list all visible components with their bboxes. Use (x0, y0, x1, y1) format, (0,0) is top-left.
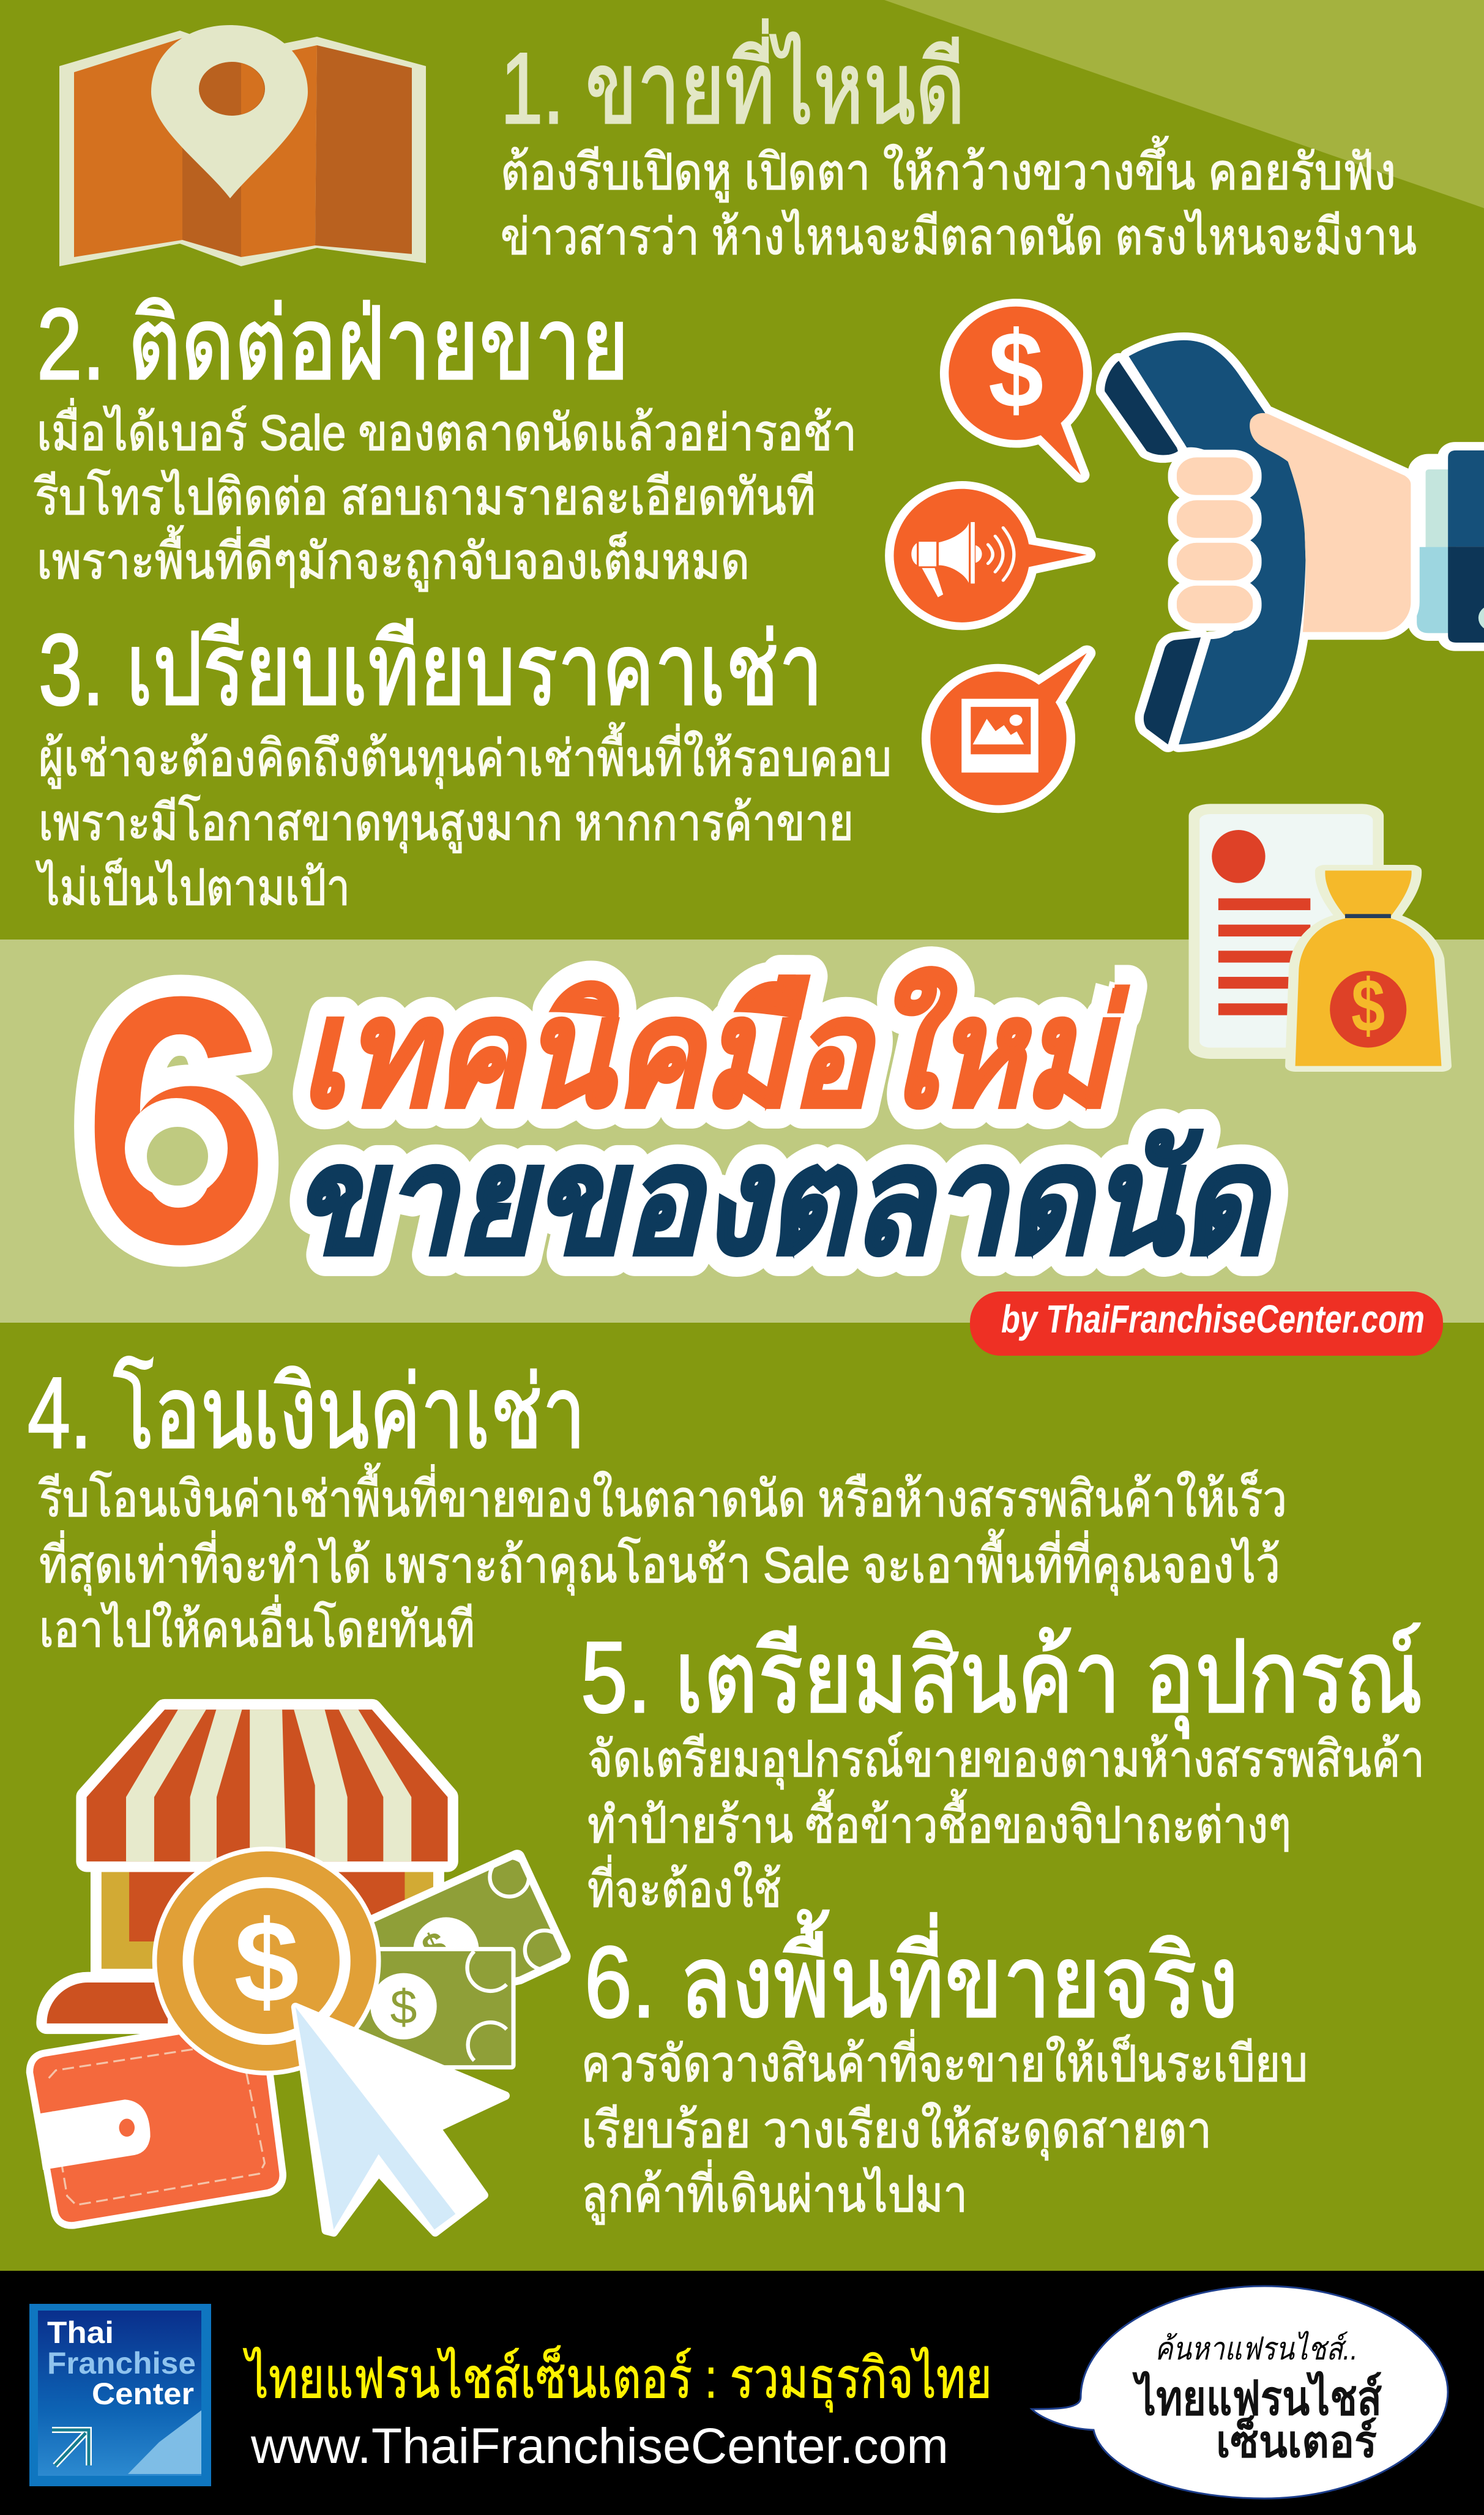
title line 1: เทคนิคมือใหม่ (300, 968, 1128, 1137)
icon: coin: $ (234, 1896, 299, 2027)
title line 2: ขายของตลาดนัด (293, 1116, 1272, 1284)
icon: hand holding phone with speech bubbles (893, 307, 1484, 805)
text block 5: ทำป้ายร้าน ซื้อข้าวชื้อของจิปาถะต่างๆ (587, 1789, 1291, 1853)
logo: Thai Franchise Center: Franchise (47, 2346, 196, 2380)
icon: banknotes: $ (416, 1923, 453, 1971)
icon: document and money bag (1188, 804, 1442, 1066)
heading 2: 2. ติดต่อฝ่ายขาย (37, 288, 629, 400)
icon: sleeve and cuff (1417, 450, 1484, 643)
heading 6: 6. ลงพื้นที่ขายจริง (584, 1910, 1239, 2038)
text block 2: รีบโทรไปติดต่อ สอบถามรายละเอียดทันที (34, 469, 816, 525)
icon: document (1188, 804, 1384, 1059)
icon: money bag (1296, 870, 1442, 1066)
footer tagline: ไทยแฟรนไชส์เซ็นเตอร์ : รวมธุรกิจไทย (242, 2345, 992, 2413)
text block 5 (587, 1732, 1425, 1918)
callout: speech bubble (1032, 2286, 1448, 2498)
icon: wallet (33, 2022, 279, 2222)
icon: picture speech bubble (930, 653, 1087, 805)
icon: money bag: $ (1351, 963, 1385, 1047)
panel: section 1 (59, 19, 1417, 266)
callout: speech bubble: ค้นหาแฟรนไชส์.. (1155, 2331, 1358, 2367)
text block 2: เมื่อได้เบอร์ Sale ของตลาดนัดแล้วอย่ารอช้า (37, 398, 857, 461)
text block 4 (38, 1463, 1287, 1657)
icon: coin (157, 1852, 376, 2071)
text block 5: ที่จะต้องใช้ (587, 1855, 781, 1918)
numeral 6: 6 (83, 924, 270, 1317)
text block 3: ไม่เป็นไปตามเป้า (35, 858, 350, 916)
icon: banknotes (351, 1858, 564, 2065)
icon: map with pin (59, 25, 426, 266)
icon: shop, coin, banknotes, wallet and cursor (33, 1710, 564, 2232)
callout: by ThaiFranchiseCenter.com (970, 1291, 1443, 1356)
text block 3 (35, 722, 892, 916)
icon: phone handset (1105, 340, 1305, 744)
panel: section 3 (35, 613, 892, 916)
title line 2: ขายของตลาดนัด (293, 1116, 1272, 1284)
heading 4: 4. โอนเงินค่าเช่า (28, 1356, 586, 1469)
text block 4: เอาไปให้คนอื่นโดยทันที (39, 1594, 475, 1657)
text block 6: ลูกค้าที่เดินผ่านไปมา (581, 2159, 968, 2224)
title line 1: เทคนิคมือใหม่ (300, 968, 1128, 1137)
panel: section 6 (581, 1910, 1308, 2224)
callout: speech bubble: ไทยแฟรนไชส์ (1132, 2371, 1382, 2425)
logo: Thai Franchise Center: Center (92, 2377, 194, 2411)
icon: cursor arrow (296, 2007, 505, 2232)
logo: Thai Franchise Center (29, 2304, 211, 2486)
icon: banknotes: $ (390, 1979, 417, 2034)
text block 4: รีบโอนเงินค่าเช่าพื้นที่ขายของในตลาดนัด หรือห้างสรรพสินค้าให้เร็ว (38, 1463, 1287, 1527)
icon: shop (47, 1710, 448, 2024)
numeral 6: 6 (83, 924, 270, 1317)
text block 6 (581, 2029, 1308, 2224)
text block 1: ต้องรีบเปิดหู เปิดตา ให้กว้างขวางขึ้น คอยรับฟัง (501, 136, 1396, 202)
icon: megaphone speech bubble (893, 489, 1087, 622)
text block 4: ที่สุดเท่าที่จะทำได้ เพราะถ้าคุณโอนช้า Sale จะเอาพื้นที่ที่คุณจองไว้ (39, 1529, 1280, 1596)
panel: section 4 (28, 1356, 1287, 1657)
icon: dollar speech bubble: $ (988, 309, 1043, 431)
panel: section 5 (581, 1621, 1425, 1918)
text block 3: เพราะมีโอกาสขาดทุนสูงมาก หากการค้าขาย (39, 795, 854, 853)
logo: Thai Franchise Center: Thai (47, 2315, 114, 2350)
icon: palm outline (1250, 413, 1411, 632)
icon: hand (1177, 413, 1411, 632)
text block 2: เพราะพื้นที่ดีๆมักจะถูกจับจองเต็มหมด (37, 525, 750, 591)
footer url: www.ThaiFranchiseCenter.com (250, 2418, 949, 2474)
panel: footer (0, 2271, 1484, 2515)
text block 2 (34, 398, 857, 591)
text block 6: เรียบร้อย วางเรียงให้สะดุดสายตา (581, 2102, 1212, 2161)
panel: section 2 (34, 288, 857, 591)
panel: title band (0, 940, 1484, 1323)
heading 3: 3. เปรียบเทียบราคาเช่า (39, 613, 823, 726)
heading 1: 1. ขายที่ไหนดี (501, 19, 965, 144)
callout: speech bubble: เซ็นเตอร์ (1216, 2415, 1377, 2467)
text block 6: ควรจัดวางสินค้าที่จะขายให้เป็นระเบียบ (581, 2029, 1308, 2092)
title: 6 techniques (83, 924, 1272, 1317)
text block 1 (501, 136, 1417, 265)
text block 3: ผู้เช่าจะต้องคิดถึงต้นทุนค่าเช่าพื้นที่ให้รอบคอบ (39, 722, 892, 789)
icon: dollar speech bubble (949, 307, 1083, 475)
